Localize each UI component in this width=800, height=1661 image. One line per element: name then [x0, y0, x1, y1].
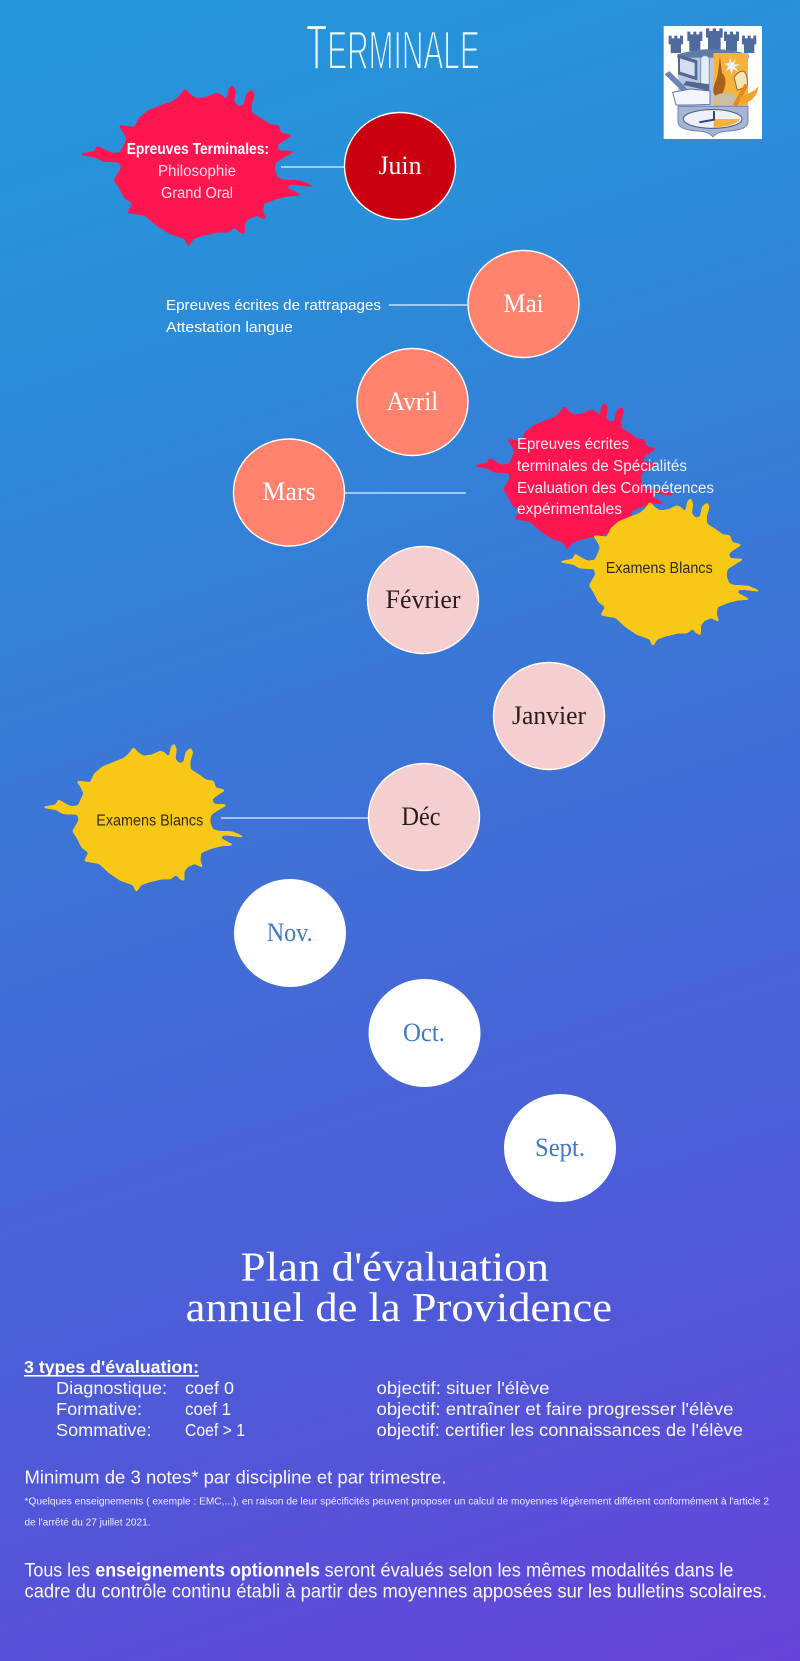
month: Juin: Juin: [378, 151, 422, 180]
splat shape yellow: [560, 499, 760, 646]
text: Epreuves Terminales: Epreuves Terminales:: [127, 141, 269, 158]
title: TERMINALE: [306, 11, 480, 83]
row: diagnostique: objectif: situer l'élève: [376, 1378, 550, 1398]
month: Janvier: [494, 662, 604, 770]
text: Epreuves écrites terminales: Epreuves écrites: [517, 436, 629, 453]
text: minimum de notes: Minimum de 3 notes* par discipline et par trimestre.: [24, 1468, 446, 1488]
month: Déc: [368, 764, 480, 870]
text: Epreuves écrites terminales: Evaluation des Compétences: [517, 480, 714, 497]
month: Juin: [344, 112, 456, 220]
text: enseignements optionnels: enseignements optionnels: [95, 1561, 320, 1582]
month: Avril: Avril: [387, 387, 438, 416]
splat: Epreuves de spécialités: [475, 403, 674, 549]
connector: Mai: [389, 304, 467, 306]
row: formative: objectif: entraîner et faire progresser l'élève: [376, 1399, 734, 1419]
month: Mai: Mai: [504, 289, 544, 318]
label: Examens Blancs: Examens Blancs: [96, 812, 204, 829]
footnote: *Quelques enseignements ( exemple : EMC,...), en raison de leur spécificités peuvent proposer un calcul de moyennes légèrement différent conformément à l'article 2: [24, 1497, 769, 1508]
row: sommative: objectif: certifier les connaissances de l'élève: [376, 1420, 743, 1440]
text block: 3 types d'évaluation: [24, 1357, 743, 1440]
row: sommative: [56, 1420, 743, 1440]
month: Avril: [357, 348, 468, 456]
row: sommative: Coef > 1: [185, 1420, 245, 1440]
splat: Examens Blancs février: [560, 499, 760, 646]
splat shape red: [80, 86, 313, 246]
connector: Mars: [345, 492, 466, 494]
month: Sept.: [504, 1094, 616, 1202]
text: Mai epreuves: [166, 297, 381, 336]
connector: Déc: [221, 817, 368, 819]
month: Mars: [234, 439, 344, 546]
month: Mars: Mars: [262, 477, 316, 506]
text: Epreuves Terminales: [127, 141, 269, 202]
month: Oct.: Oct.: [403, 1018, 445, 1047]
text: Epreuves écrites terminales: [517, 436, 714, 518]
text: Epreuves Terminales: Philosophie: [158, 163, 236, 180]
splat: Epreuves Terminales: [80, 86, 313, 246]
row: formative: Formative:: [56, 1399, 142, 1419]
month: Oct.: [368, 979, 480, 1087]
splat: Examens Blancs décembre: [44, 744, 243, 892]
footnote: [24, 1497, 769, 1529]
row: formative: coef 1: [185, 1399, 231, 1419]
label: Examens Blancs: Examens Blancs: [606, 560, 713, 577]
row: diagnostique: Diagnostique:: [56, 1378, 167, 1398]
month: Mai: [468, 250, 579, 358]
text: enseignements optionnels: Tous les: [24, 1561, 90, 1582]
month: Février: [368, 546, 478, 654]
text: Epreuves Terminales: Grand Oral: [161, 185, 233, 202]
month: Nov.: [234, 879, 346, 987]
text: Mai epreuves: Epreuves écrites de rattrapages: [166, 297, 381, 314]
month: Janvier: Janvier: [512, 701, 586, 730]
text: Epreuves écrites terminales: expérimentales: [517, 501, 622, 518]
splat shape yellow: [44, 744, 243, 892]
row: formative: [56, 1399, 734, 1419]
heading: plan d'évaluation: [186, 1244, 612, 1330]
sub-heading: 3 types d'évaluation:: [24, 1357, 199, 1377]
text: enseignements optionnels: [24, 1561, 767, 1603]
icon: school crest logo: [664, 26, 762, 139]
text: enseignements optionnels: cadre du contrôle continu établi à partir des moyennes apposées sur les bulletins scolaires.: [24, 1582, 767, 1603]
text: enseignements optionnels: seront évalués selon les mêmes modalités dans le: [324, 1561, 734, 1582]
month: Février: Février: [386, 585, 461, 614]
row: diagnostique: coef 0: [185, 1378, 234, 1398]
text: Mai epreuves: Attestation langue: [166, 319, 293, 336]
text: Epreuves écrites terminales: terminales de Spécialités: [517, 458, 687, 475]
row: diagnostique: [56, 1378, 550, 1398]
heading: plan d'évaluation: annuel de la Providence: [186, 1284, 612, 1330]
heading: plan d'évaluation: Plan d'évaluation: [241, 1244, 549, 1290]
connector: Juin: [281, 166, 344, 168]
month: Nov.: Nov.: [267, 918, 313, 947]
month: Déc: Déc: [402, 802, 440, 831]
month: Sept.: Sept.: [535, 1133, 585, 1162]
row: sommative: Sommative:: [56, 1420, 152, 1440]
footnote: de l'arrêté du 27 juillet 2021.: [24, 1518, 150, 1529]
